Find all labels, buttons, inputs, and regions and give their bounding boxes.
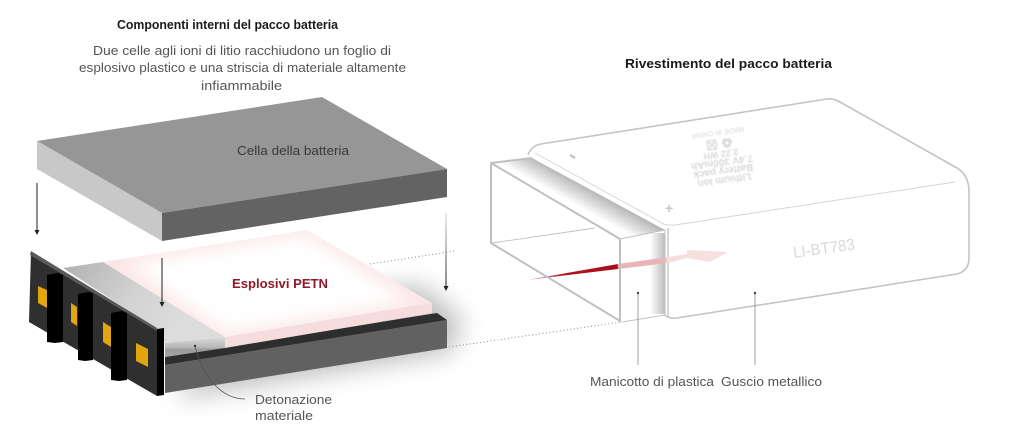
arrow: left drop	[34, 183, 40, 235]
model number: LI-BT783	[792, 236, 856, 262]
connector plate	[29, 252, 157, 396]
polarity marks	[570, 155, 575, 158]
printed label: 7.4V 300mAh	[690, 152, 754, 171]
sleeve outlines	[491, 158, 665, 322]
label: PETN explosives: Esplosivi PETN	[232, 276, 328, 291]
callout: metal shell: Guscio metallico	[721, 374, 822, 389]
sleeve side band	[650, 233, 665, 314]
printed label	[686, 124, 756, 189]
black tabs	[47, 273, 63, 343]
text block: description	[79, 43, 406, 93]
dark strip	[165, 313, 447, 365]
text block: description: Due celle agli ioni di litio racchiudono un foglio di	[93, 43, 391, 58]
illustration: battery cell slab	[37, 97, 447, 241]
shadow	[180, 285, 462, 398]
printed label: MADE IN CHINA	[691, 125, 744, 139]
callout: plastic sleeve: Manicotto di plastica	[590, 374, 715, 389]
illustration: lower battery assembly	[29, 230, 462, 398]
base front	[165, 320, 447, 393]
gold contacts	[38, 286, 47, 308]
detonating material	[63, 262, 225, 343]
printed label: 2.22 WH	[703, 147, 739, 161]
illustration: plastic sleeve	[491, 158, 728, 322]
callout: plastic sleeve	[590, 292, 715, 389]
printed label: Battery pack	[692, 161, 754, 180]
sleeve top shadow	[491, 158, 665, 239]
text block: description: infiammabile	[201, 78, 282, 93]
arrow: right drop	[444, 213, 448, 291]
callout: detonating material: materiale	[255, 408, 313, 423]
printed label: Lithium Ion	[697, 170, 752, 189]
printed label: ♻ ☒	[705, 134, 734, 153]
label: battery cell: Cella della batteria	[237, 143, 350, 158]
title: battery pack casing: Rivestimento del pacco batteria	[625, 56, 833, 71]
illustration: dotted guide lines	[370, 251, 621, 347]
red arrow	[527, 250, 728, 280]
illustration: metal shell	[528, 99, 969, 318]
callout: detonating material	[194, 345, 332, 423]
PETN sheet	[103, 230, 432, 337]
arrow: middle drop	[160, 258, 164, 307]
callout: detonating material: Detonazione	[255, 392, 332, 407]
title: internal components: Componenti interni del pacco batteria	[117, 17, 339, 32]
text block: description: esplosivo plastico e una striscia di materiale altamente	[79, 60, 406, 75]
illustration: metal shell: +	[665, 200, 673, 216]
callout: metal shell	[721, 292, 822, 389]
